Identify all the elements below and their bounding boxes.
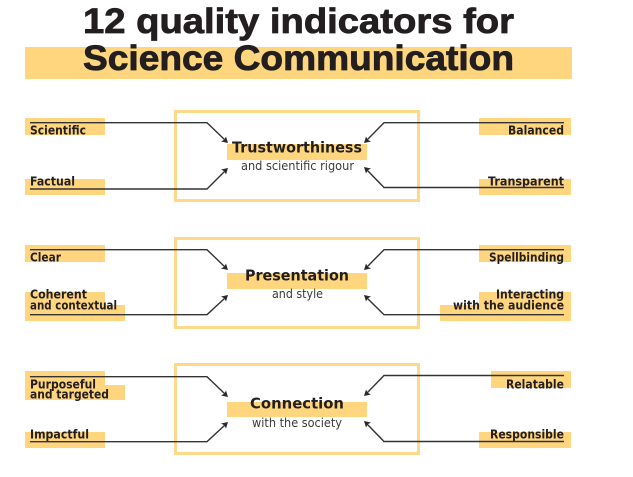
indicator: Spellbinding: Spellbinding: [489, 250, 564, 264]
subheading: with the society: with the society: [252, 416, 342, 430]
box: presentation: [176, 238, 418, 328]
panel: connection: [25, 364, 571, 454]
box: trustworthiness: [176, 112, 418, 200]
subheading: and scientific rigour: and scientific rigour: [241, 159, 354, 173]
panel: trustworthiness: [25, 112, 571, 200]
panel: presentation: [25, 238, 571, 328]
indicator: Coherent and contextual: Coherent: [30, 286, 87, 302]
subheading: and style: and style: [272, 287, 323, 301]
heading: trustworthiness: Trustworthiness: [232, 138, 362, 156]
indicator: Purposeful and targeted: [25, 371, 228, 402]
indicator: Coherent and contextual: and contextual: [30, 298, 117, 312]
heading: connection: Connection: [250, 394, 344, 412]
indicator: Purposeful and targeted: and targeted: [30, 386, 109, 402]
indicator: Coherent and contextual: [25, 286, 228, 321]
indicator: Relatable: [364, 371, 571, 396]
indicator: Responsible: Responsible: [490, 426, 564, 442]
label highlight: trustworthiness: [227, 144, 367, 160]
indicator: Interacting with the audience: [364, 286, 571, 321]
indicator: Balanced: [364, 118, 571, 143]
indicator: Scientific: [25, 118, 228, 143]
indicator: Purposeful and targeted: Purposeful: [30, 376, 96, 392]
title: Science Communication: [83, 39, 514, 78]
indicator: Responsible: [364, 421, 571, 448]
indicator: Scientific: Scientific: [30, 122, 86, 138]
indicator: Interacting with the audience: with the audience: [453, 298, 564, 312]
indicator: Clear: Clear: [30, 250, 62, 264]
heading: presentation: Presentation: [245, 266, 349, 284]
box: connection: [176, 364, 418, 454]
indicator: Relatable: Relatable: [506, 376, 564, 392]
indicator: Clear: [25, 245, 228, 270]
label highlight: connection: [227, 402, 367, 417]
title: [25, 2, 572, 79]
indicator: Spellbinding: [364, 245, 571, 270]
indicator: Factual: [25, 168, 228, 195]
title: 12 quality indicators for: [83, 2, 514, 41]
indicator: Impactful: [25, 422, 228, 448]
indicator: Impactful: Impactful: [30, 426, 89, 442]
indicator: Transparent: Transparent: [488, 174, 564, 188]
indicator: Transparent: [364, 167, 571, 195]
indicator: Factual: Factual: [30, 174, 75, 188]
indicator: Interacting with the audience: Interacting: [496, 286, 564, 302]
indicator: Balanced: Balanced: [508, 122, 564, 138]
label highlight: presentation: [227, 273, 367, 289]
